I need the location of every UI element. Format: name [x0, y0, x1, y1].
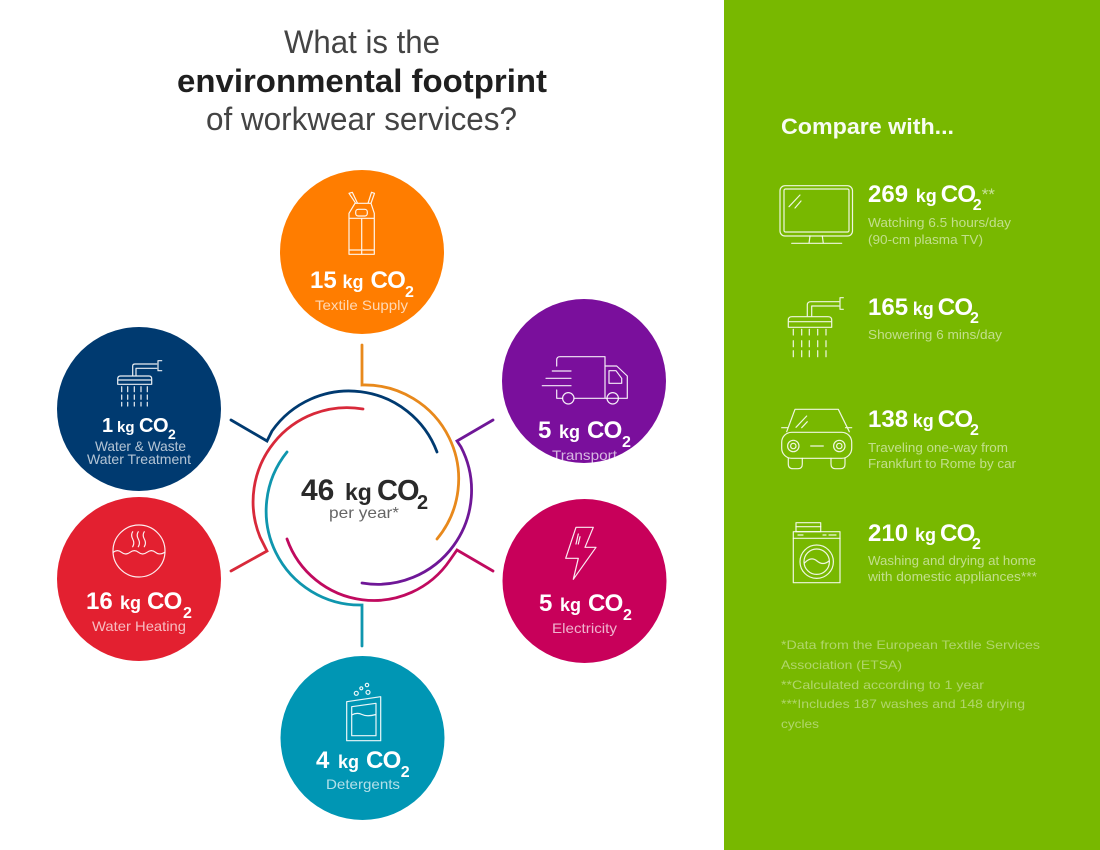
- circle: water and waste water treatment: kg: [117, 419, 135, 436]
- comparison: car: [782, 406, 1017, 471]
- circle: transport: 2: [622, 434, 631, 451]
- circle: textile supply: CO: [370, 267, 405, 294]
- icon: heated water: [113, 525, 165, 577]
- comparison: washing machine: with domestic appliances***: [867, 569, 1037, 584]
- comparison: washing machine: 210: [868, 520, 908, 547]
- circle: electricity: Electricity: [552, 620, 617, 636]
- circle: water and waste water treatment: Water & Waste: [95, 438, 186, 454]
- circle: electricity: 5: [539, 590, 552, 617]
- comparison: washing machine: CO: [940, 520, 975, 547]
- ring: textile supply: [362, 345, 459, 539]
- icon: overalls: [349, 192, 374, 254]
- comparison: television: Watching 6.5 hours/day: [868, 215, 1012, 230]
- circle: water heating: kg: [120, 593, 141, 613]
- circle: water and waste water treatment: 2: [168, 426, 176, 442]
- circle: transport: [502, 299, 666, 463]
- circle: textile supply: 15: [310, 267, 337, 294]
- circle: textile supply: Textile Supply: [315, 297, 408, 313]
- footnotes: [781, 638, 1040, 731]
- comparison: television: [780, 181, 1012, 247]
- footnotes: Association (ETSA): [781, 658, 902, 672]
- circle: electricity: CO: [588, 590, 623, 617]
- circle: detergents: 2: [401, 764, 410, 781]
- comparison: television: 269: [868, 181, 908, 208]
- comparison: car: Traveling one-way from: [868, 440, 1008, 455]
- comparison: shower: [788, 294, 1003, 357]
- comparison: shower: kg: [913, 299, 934, 319]
- circle: electricity: kg: [560, 595, 581, 615]
- circle: water heating: Water Heating: [92, 618, 186, 634]
- ring: transport: [362, 420, 493, 584]
- comparison: shower: Showering 6 mins/day: [868, 327, 1003, 342]
- circle: water heating: [57, 497, 221, 661]
- icon: washing machine: [793, 523, 840, 583]
- circle: transport: kg: [559, 422, 580, 442]
- circle: electricity: 2: [623, 607, 632, 624]
- comparison: television: 2: [973, 197, 982, 214]
- center total: [301, 474, 428, 522]
- comparison: television: CO: [941, 181, 975, 208]
- comparison: car: 2: [970, 422, 979, 439]
- icon: truck: [542, 357, 627, 404]
- circle: water and waste water treatment: CO: [139, 415, 168, 437]
- icon: shower: [788, 298, 843, 357]
- comparison: washing machine: Washing and drying at home: [868, 553, 1036, 568]
- footnotes: *Data from the European Textile Services: [781, 638, 1040, 652]
- comparison: car: kg: [913, 411, 934, 431]
- title: [177, 24, 547, 137]
- circle: textile supply: [280, 170, 444, 334]
- icon: lightning bolt: [566, 527, 596, 579]
- panel: compare with: [724, 0, 1100, 850]
- circle: water heating: 2: [183, 605, 192, 622]
- circle: water heating: CO: [147, 588, 182, 615]
- circle: textile supply: 2: [405, 284, 414, 301]
- center total: per year*: [329, 505, 399, 522]
- title: environmental footprint: [177, 63, 547, 99]
- icon: television: [780, 186, 852, 243]
- center total: CO: [377, 475, 419, 507]
- comparison: washing machine: kg: [915, 525, 936, 545]
- comparison: washing machine: [793, 520, 1037, 584]
- ring: detergents: [266, 452, 362, 646]
- center total: kg: [345, 479, 372, 505]
- circle: detergents: 4: [316, 747, 330, 774]
- title: of workwear services?: [206, 101, 517, 137]
- comparison: shower: 2: [970, 310, 979, 327]
- circle: detergents: kg: [338, 752, 359, 772]
- circle: water and waste water treatment: Water Treatment: [87, 451, 191, 467]
- circle: transport: CO: [587, 417, 622, 444]
- comparison: car: CO: [938, 406, 972, 433]
- footnotes: **Calculated according to 1 year: [781, 678, 984, 692]
- circle: transport: Transport: [552, 447, 617, 463]
- icon: shower: [118, 361, 162, 406]
- circle: textile supply: kg: [342, 272, 364, 292]
- circle: detergents: Detergents: [326, 776, 400, 792]
- title: What is the: [284, 24, 440, 60]
- center total: 46: [301, 474, 334, 507]
- circle: water heating: 16: [86, 588, 113, 615]
- comparison: television: (90-cm plasma TV): [868, 232, 983, 247]
- footnotes: cycles: [781, 717, 819, 731]
- circle: water and waste water treatment: 1: [102, 415, 113, 437]
- circle: detergents: [280, 656, 444, 820]
- comparison: car: 138: [868, 406, 908, 433]
- ring: water heating: [231, 408, 363, 571]
- ring: electricity: [287, 539, 493, 600]
- comparison: shower: CO: [938, 294, 972, 321]
- circle: electricity: [502, 499, 666, 663]
- comparison: shower: 165: [868, 294, 908, 321]
- ring: water treatment: [231, 391, 437, 452]
- center total: 2: [417, 492, 428, 514]
- circle: transport: 5: [538, 417, 551, 444]
- comparison: car: Frankfurt to Rome by car: [868, 456, 1017, 471]
- circle: water and waste water treatment: [57, 327, 221, 491]
- footnotes: ***Includes 187 washes and 148 drying: [781, 697, 1025, 711]
- icon: car: [782, 409, 852, 469]
- comparison: television: **: [982, 185, 995, 204]
- icon: detergent box: [347, 683, 381, 741]
- ring diagram: [231, 345, 493, 646]
- comparison: washing machine: 2: [972, 536, 981, 553]
- comparison: television: kg: [916, 186, 937, 206]
- circle: detergents: CO: [366, 747, 401, 774]
- heading: compare with: Compare with...: [781, 114, 954, 139]
